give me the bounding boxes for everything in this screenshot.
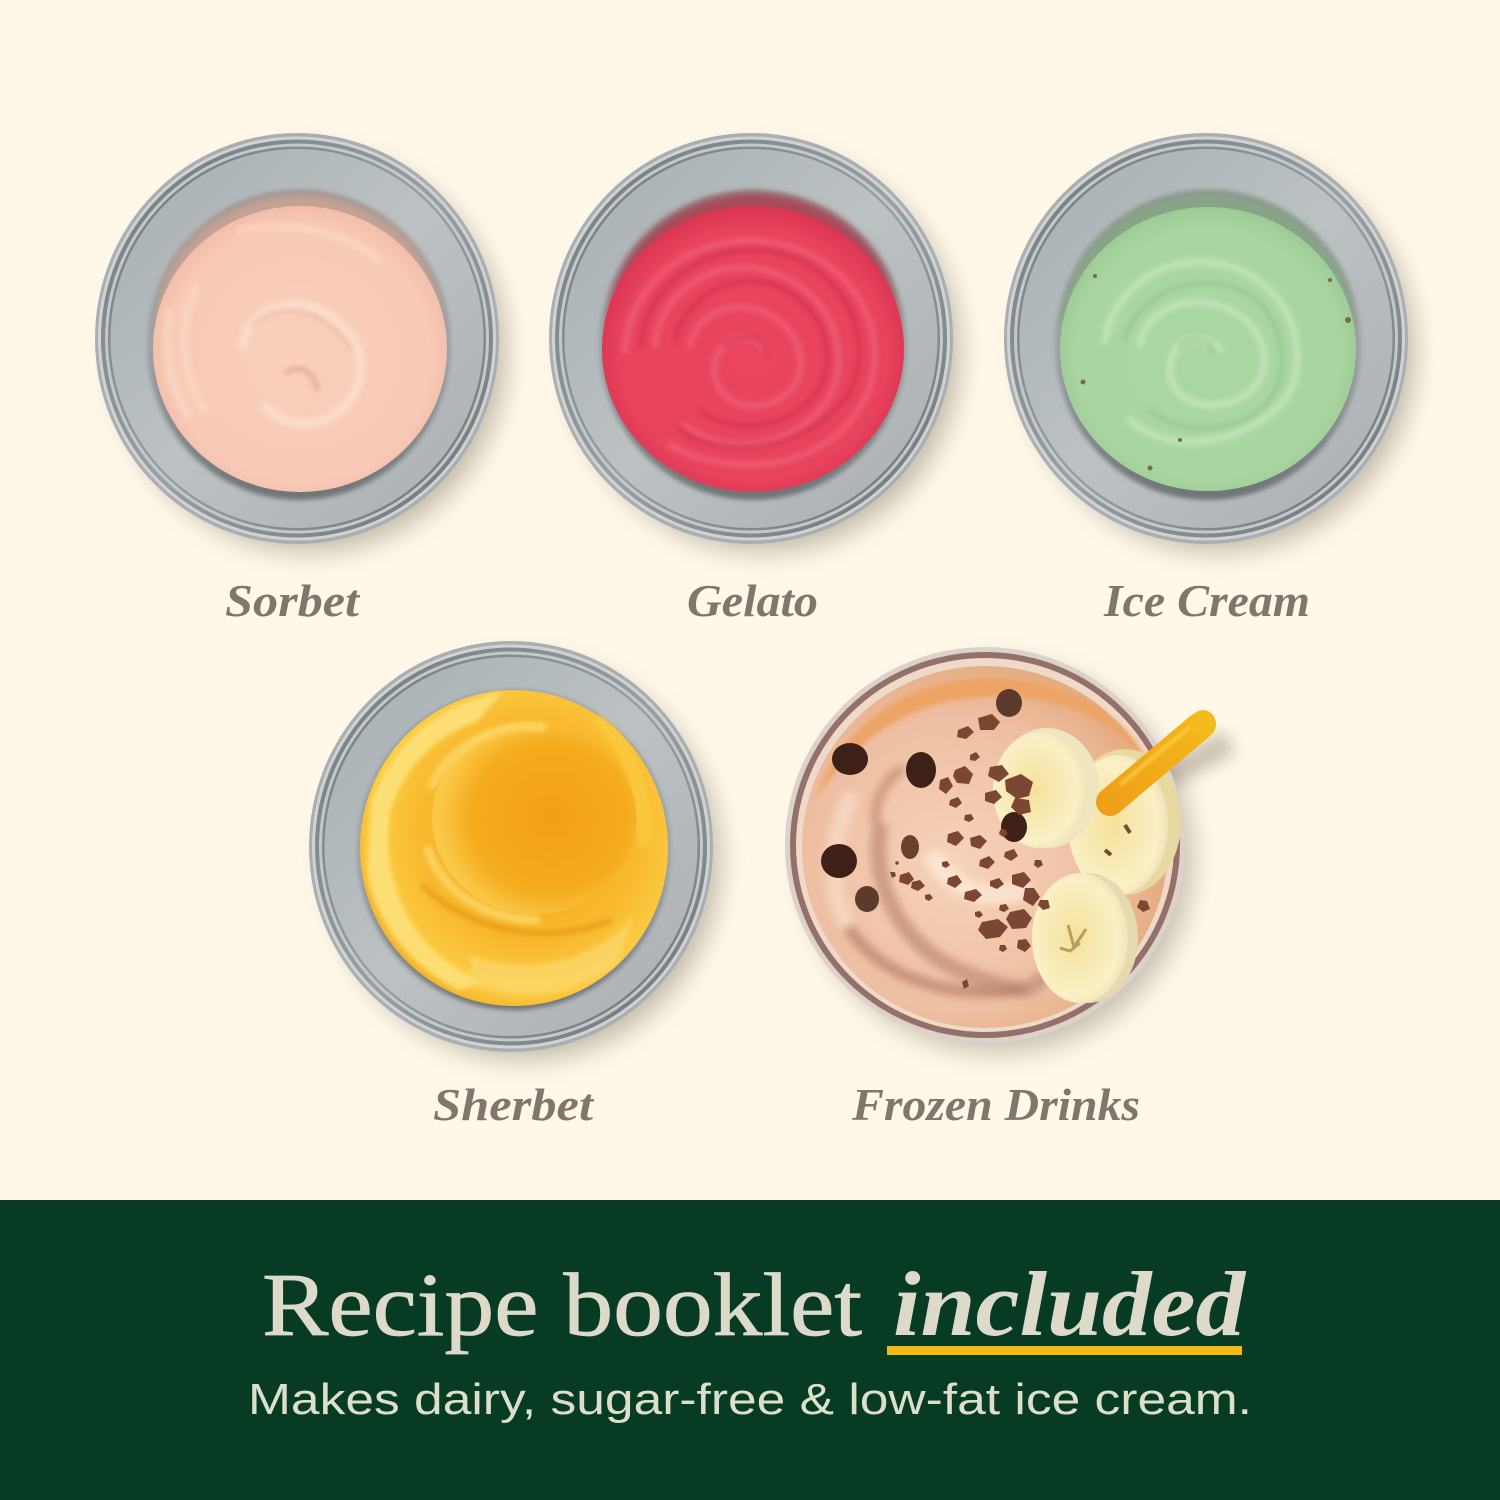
banana slices [993,728,1181,1003]
label: Ice Cream: Ice Cream [1103,575,1310,626]
banner [0,1200,1500,1500]
label: Sorbet: Sorbet [225,575,360,626]
sorbet scoop [153,206,447,492]
bowl: sherbet [309,641,720,1060]
glass: frozen drink [785,647,1230,1053]
label: Sherbet: Sherbet [433,1079,594,1130]
underline [887,1346,1242,1355]
bowl: sorbet [95,133,506,552]
chocolate crumbs [890,714,1150,989]
sherbet scoop [360,690,668,1006]
label: Frozen Drinks: Frozen Drinks [851,1079,1140,1130]
straw [1110,710,1216,802]
bowl: gelato [549,133,960,552]
subtitle: Makes dairy, sugar-free & low-fat ice cream. [248,1375,1252,1424]
milkshake swirls [834,770,1040,992]
gelato scoop [602,206,904,492]
bowl: ice cream [1004,133,1415,552]
heading: included: included [893,1253,1247,1355]
ice cream scoop [1060,207,1356,491]
chocolate chips [821,689,1027,912]
label: Gelato: Gelato [687,575,818,626]
heading: Recipe booklet: Recipe booklet [262,1256,862,1355]
